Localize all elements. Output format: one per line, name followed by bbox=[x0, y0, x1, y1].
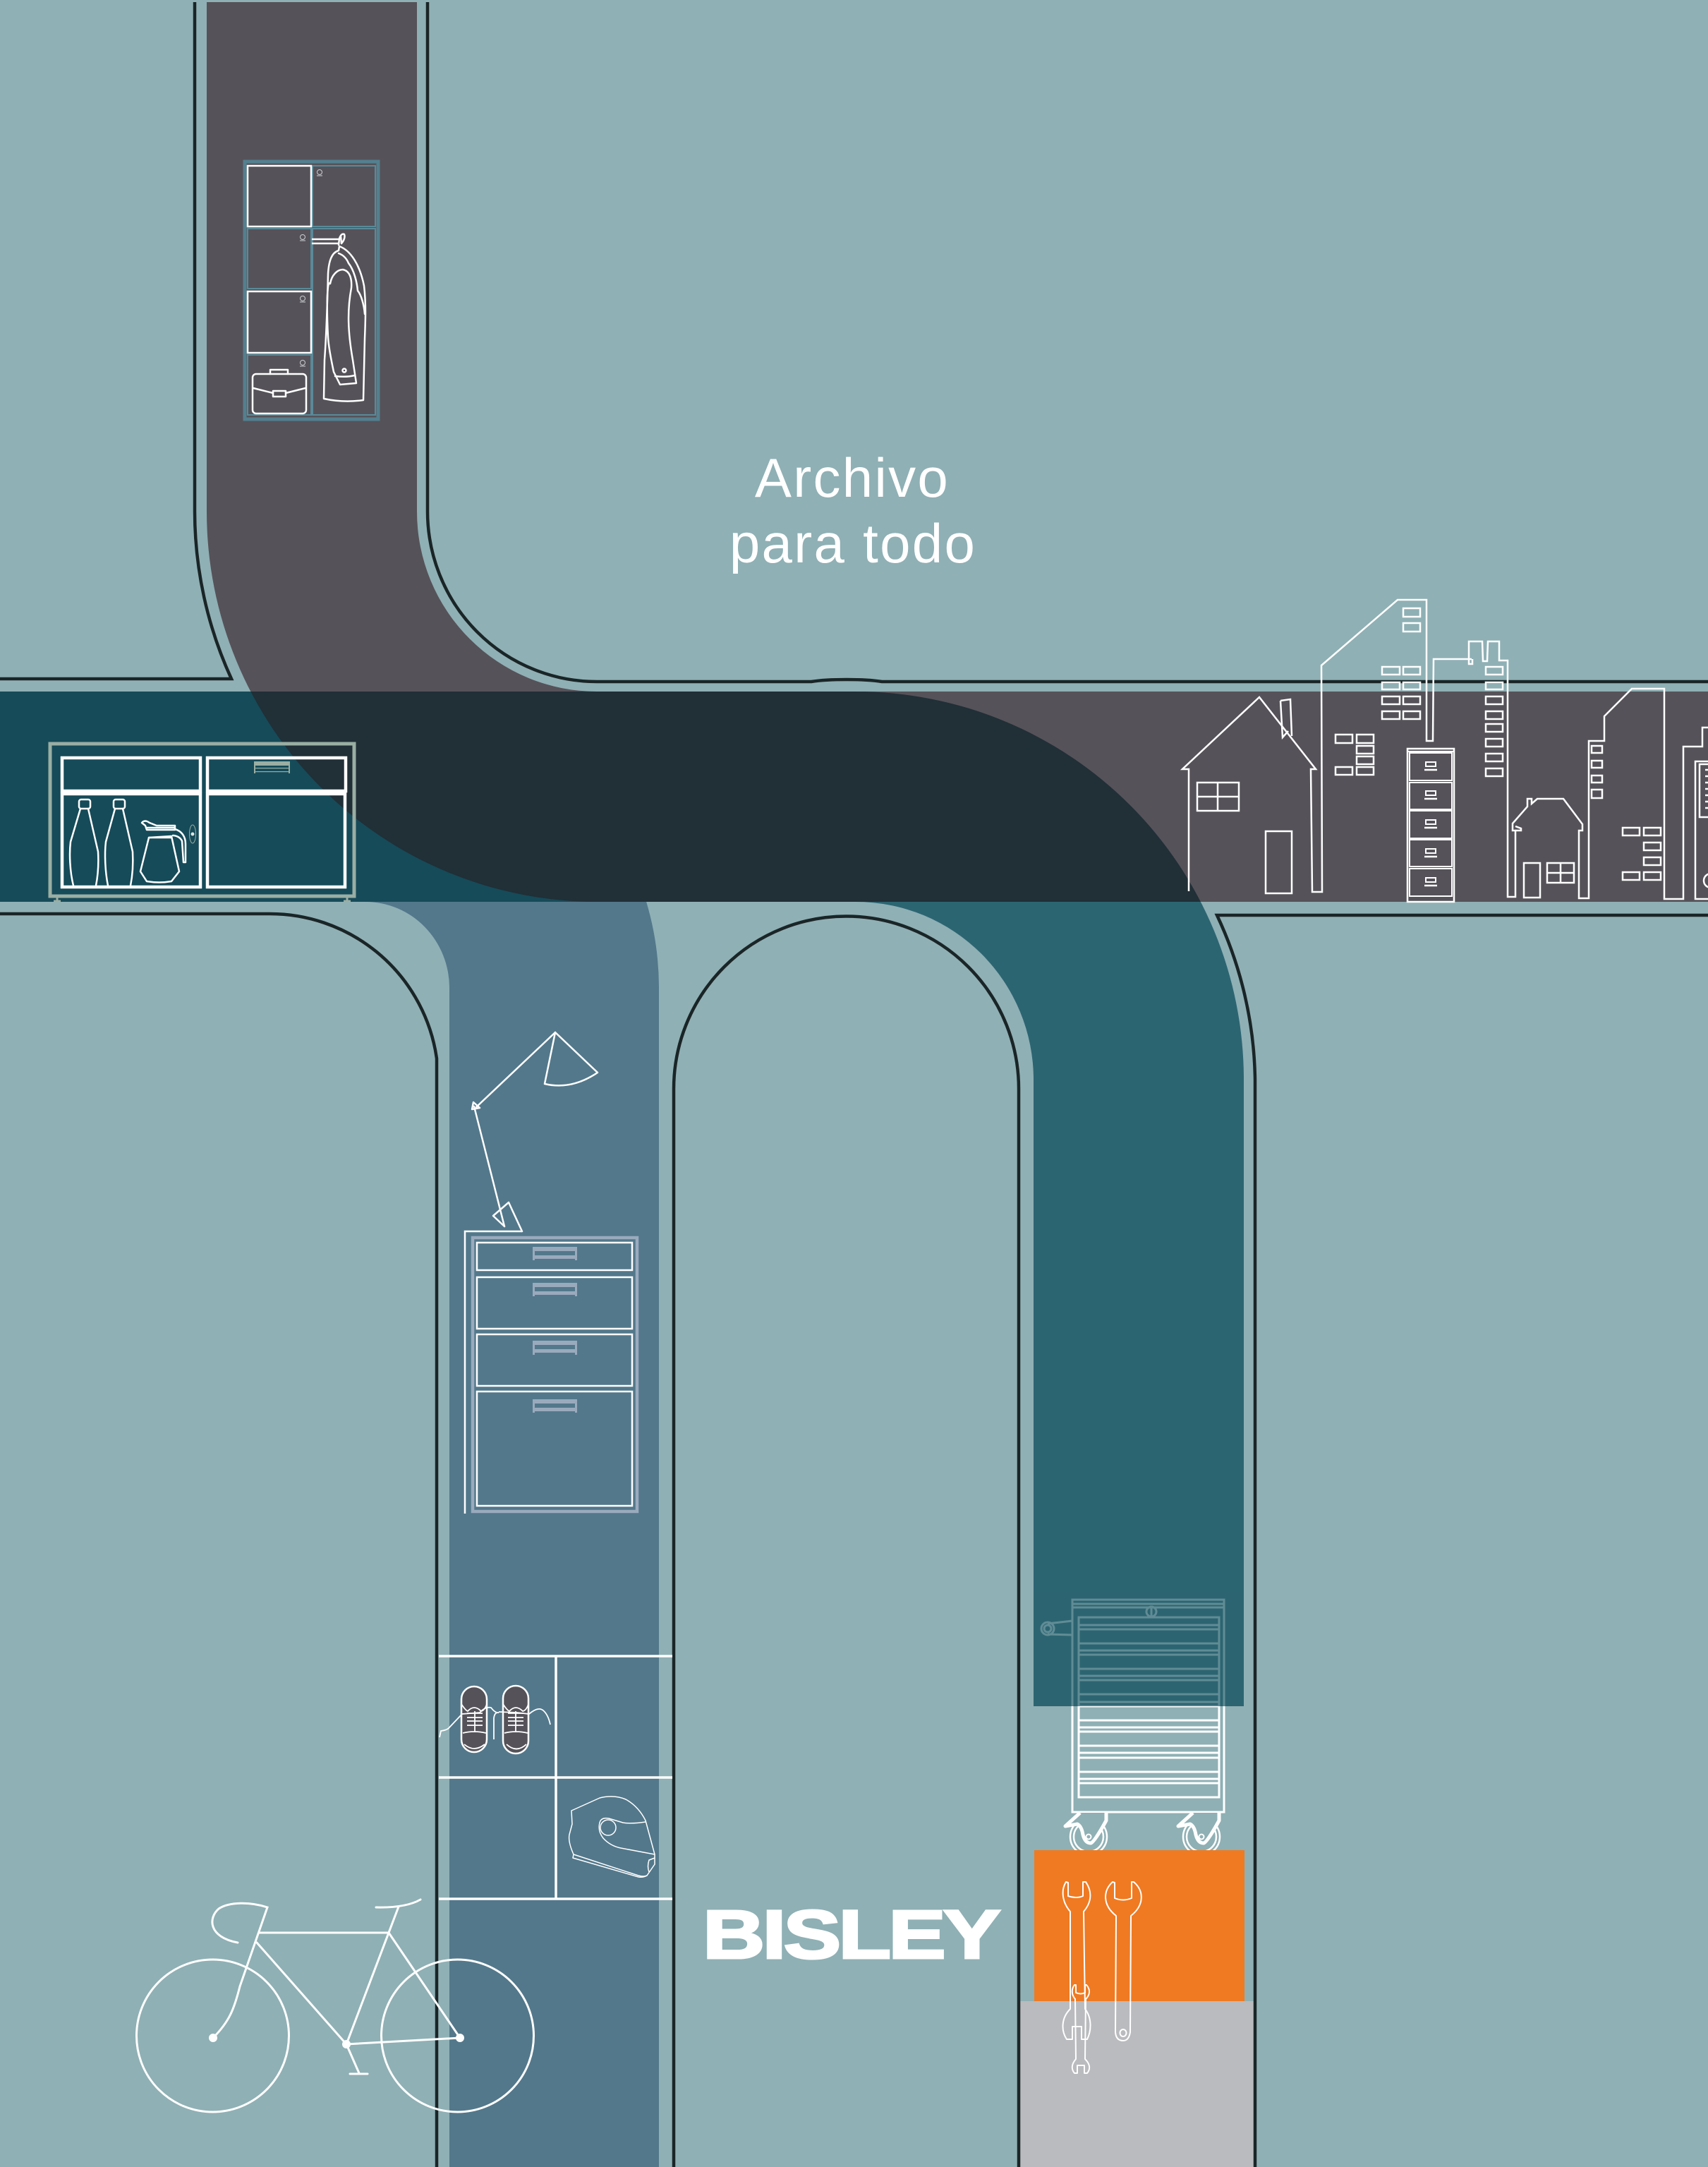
icon: motorcycle helmet bbox=[569, 1797, 655, 1877]
icon: bicycle bbox=[137, 1900, 533, 2112]
panel: road overlaps bbox=[0, 692, 1201, 902]
panel: light grey floor bbox=[1019, 2001, 1255, 2167]
icon: sideboard with bottles and jug bbox=[50, 744, 354, 902]
icon: bottle 2 bbox=[105, 799, 133, 886]
panel: orange block bbox=[1034, 1850, 1244, 2001]
icon: wrenches bbox=[1063, 1882, 1141, 2073]
icon: bottle 1 bbox=[70, 799, 98, 886]
icon: city skyline with houses and towers bbox=[1182, 600, 1708, 902]
panel: grey road bbox=[207, 2, 1708, 902]
icon: tall filing cabinet bbox=[1407, 749, 1454, 902]
icon: cart casters bbox=[1064, 1813, 1221, 1850]
icon: ring wrench bbox=[1106, 1882, 1141, 2041]
icon: desk lamp bbox=[472, 1032, 598, 1231]
panel: teal road to tool cart bbox=[0, 692, 1244, 1706]
skyline windows bbox=[1335, 608, 1661, 880]
icon: drawer cabinet bbox=[465, 1231, 637, 1514]
icon: locker with coat and briefcase bbox=[245, 162, 378, 419]
icon: cubby shelves bbox=[439, 1656, 672, 1899]
title: para todo bbox=[729, 512, 976, 574]
icon: briefcase bbox=[253, 370, 306, 414]
title: Archivo bbox=[755, 447, 950, 509]
icon: tool cart bbox=[1040, 1599, 1225, 1850]
panel: steel blue road bbox=[0, 692, 659, 2167]
icon: small wrench bbox=[1072, 1985, 1089, 2073]
icon: long double wrench bbox=[1063, 1882, 1091, 2039]
logo: BISLEY: BISLEY bbox=[703, 1897, 1000, 1973]
title bbox=[729, 447, 976, 574]
icon: appliance at right edge bbox=[1695, 761, 1708, 899]
icon: jug bbox=[140, 821, 186, 882]
icon: sneakers bbox=[440, 1686, 550, 1753]
icon: coat bbox=[324, 234, 365, 402]
